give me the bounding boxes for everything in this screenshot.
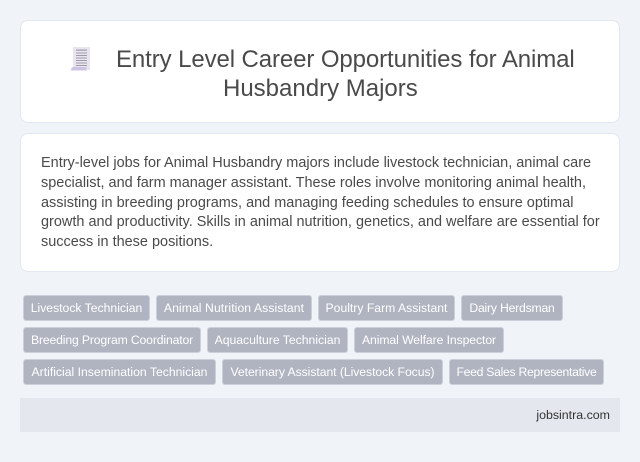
- icon: document scroll: [71, 47, 90, 70]
- tag: Animal Nutrition Assistant: Animal Nutrition Assistant: [164, 301, 304, 315]
- tag: Dairy Herdsman: Dairy Herdsman: [469, 301, 555, 315]
- tag: Livestock Technician: [23, 295, 150, 321]
- tag: Breeding Program Coordinator: Breeding Program Coordinator: [31, 333, 193, 347]
- tag: Animal Nutrition Assistant: [156, 295, 312, 321]
- description text: success in these positions.: [41, 234, 213, 250]
- footer bar: [20, 398, 620, 432]
- description text: growth and productivity. Skills in animal nutrition, genetics, and welfare are essential for: [41, 214, 600, 230]
- title: [116, 46, 575, 102]
- description text: Entry-level jobs for Animal Husbandry majors include livestock technician, animal care: [41, 155, 591, 171]
- tag: Artificial Insemination Technician: [23, 359, 216, 385]
- tag: Poultry Farm Assistant: [318, 295, 455, 321]
- description text: assisting in breeding programs, and managing feeding schedules to ensure optimal: [41, 194, 573, 210]
- tag: Feed Sales Representative: [449, 359, 604, 385]
- tag: Veterinary Assistant (Livestock Focus): [222, 359, 443, 385]
- tag: Aquaculture Technician: [207, 327, 348, 353]
- tag: Aquaculture Technician: Aquaculture Technician: [215, 333, 340, 347]
- title: Husbandry Majors: [223, 74, 418, 102]
- title: Entry Level Career Opportunities for Animal: [116, 46, 575, 72]
- tag: Artificial Insemination Technician: Artificial Insemination Technician: [32, 365, 207, 379]
- tag: Breeding Program Coordinator: [23, 327, 201, 353]
- tag: Feed Sales Representative: Feed Sales Representative: [456, 365, 596, 379]
- description text: [41, 155, 600, 250]
- tag: Animal Welfare Inspector: Animal Welfare Inspector: [362, 333, 496, 347]
- panel: description card: [20, 133, 620, 272]
- tag: Dairy Herdsman: [461, 295, 563, 321]
- tag: Poultry Farm Assistant: Poultry Farm Assistant: [326, 301, 447, 315]
- tag: Animal Welfare Inspector: [354, 327, 504, 353]
- description text: specialist, and farm manager assistant. These roles involve monitoring animal health,: [41, 175, 586, 191]
- footer source text: jobsintra.com: [536, 408, 610, 422]
- tag: Livestock Technician: Livestock Technician: [31, 301, 142, 315]
- tag: Veterinary Assistant (Livestock Focus): Veterinary Assistant (Livestock Focus): [230, 365, 434, 379]
- panel: title card: [20, 20, 620, 123]
